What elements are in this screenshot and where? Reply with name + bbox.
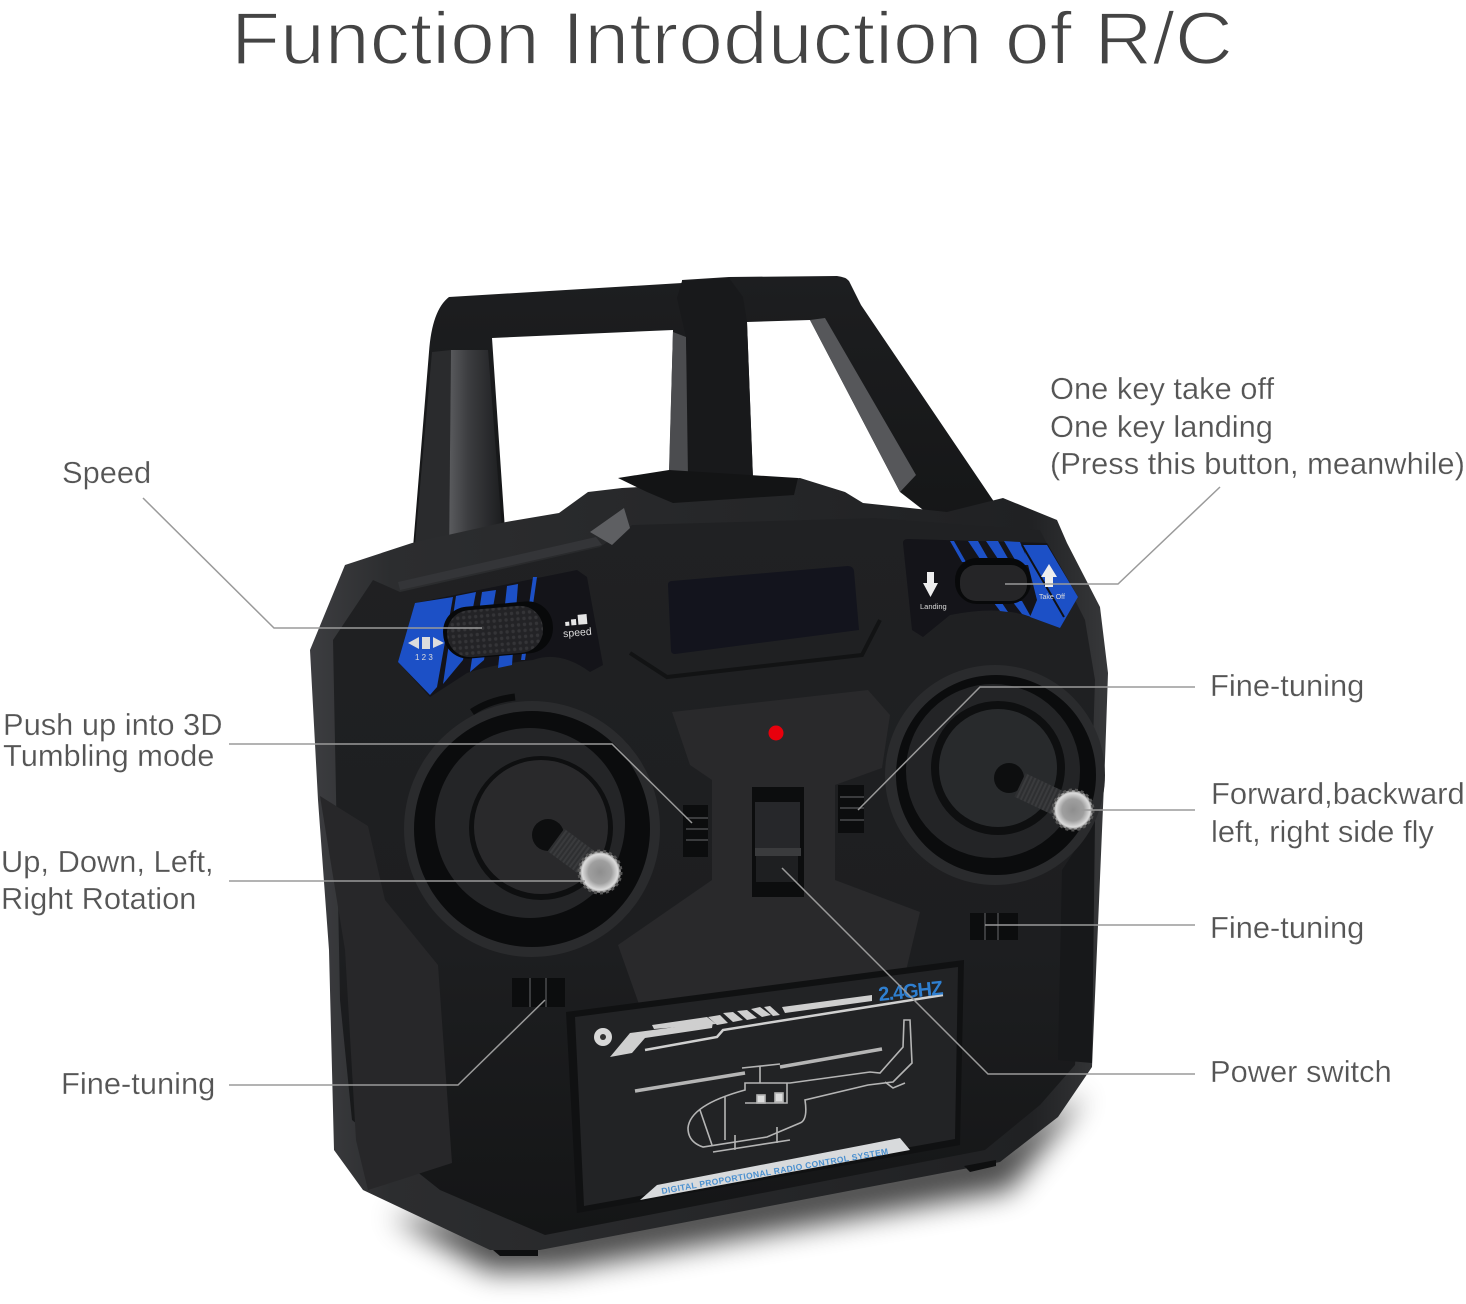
leader lines [143, 487, 1220, 1085]
labels: Fine-tuning [61, 1066, 215, 1101]
power LED [768, 726, 784, 740]
shoulder highlights [398, 537, 602, 590]
labels: Speed [62, 455, 151, 490]
cover emblem [594, 1028, 612, 1046]
takeoff arrow [1041, 564, 1057, 587]
body face [333, 518, 1095, 1235]
takeoff panel [903, 539, 1078, 637]
takeoff panel: Landing [920, 602, 947, 611]
screen recess line [630, 620, 880, 677]
speed panel: 1 2 3 [415, 653, 433, 662]
labels: Push up into 3D [3, 707, 222, 742]
cover stripes [610, 1022, 713, 1057]
labels: Fine-tuning [1210, 668, 1364, 703]
left leg face [449, 350, 504, 555]
labels: One key landing [1050, 409, 1273, 444]
labels: Power switch [1210, 1054, 1392, 1089]
labels: Forward,backward [1211, 776, 1465, 811]
handle glass [810, 318, 916, 492]
right stick [885, 665, 1105, 885]
labels: Right Rotation [1, 881, 196, 916]
battery cover: 2.4GHZ [877, 977, 944, 1006]
takeoff panel: Take Off [1039, 594, 1065, 601]
cover banner [640, 1138, 910, 1200]
power switch [752, 787, 804, 897]
labels: left, right side fly [1211, 814, 1434, 849]
takeoff button [960, 565, 1027, 601]
helicopter outline [635, 1020, 912, 1152]
battery cover: DIGITAL PROPORTIONAL RADIO CONTROL SYSTEM [661, 1146, 889, 1196]
labels: Tumbling mode [3, 738, 214, 773]
battery cover [566, 960, 964, 1213]
body shell [310, 478, 1108, 1250]
labels: Fine-tuning [1210, 910, 1364, 945]
left grip [320, 796, 452, 1190]
speed slider button [445, 604, 545, 659]
left leg outer band [414, 350, 451, 555]
left stick [404, 701, 660, 957]
right grip [1058, 820, 1095, 1063]
screen [668, 566, 859, 654]
rubber feet [493, 1160, 996, 1256]
controller [310, 276, 1108, 1272]
labels [1, 371, 1465, 1101]
ground shadow [390, 1095, 1085, 1272]
labels: One key take off [1050, 371, 1274, 406]
speed panel: speed [563, 626, 592, 640]
textured center panel [618, 690, 920, 1007]
centre post [669, 332, 688, 478]
trim switches [512, 785, 1018, 1007]
connector top [618, 470, 798, 503]
speed arrows [408, 637, 444, 649]
scroll ribs left [472, 697, 515, 712]
labels: (Press this button, meanwhile) [1050, 446, 1465, 481]
labels: Up, Down, Left, [1, 844, 214, 879]
handle [412, 276, 1003, 560]
speed panel [398, 570, 603, 697]
landing arrow [923, 572, 938, 597]
